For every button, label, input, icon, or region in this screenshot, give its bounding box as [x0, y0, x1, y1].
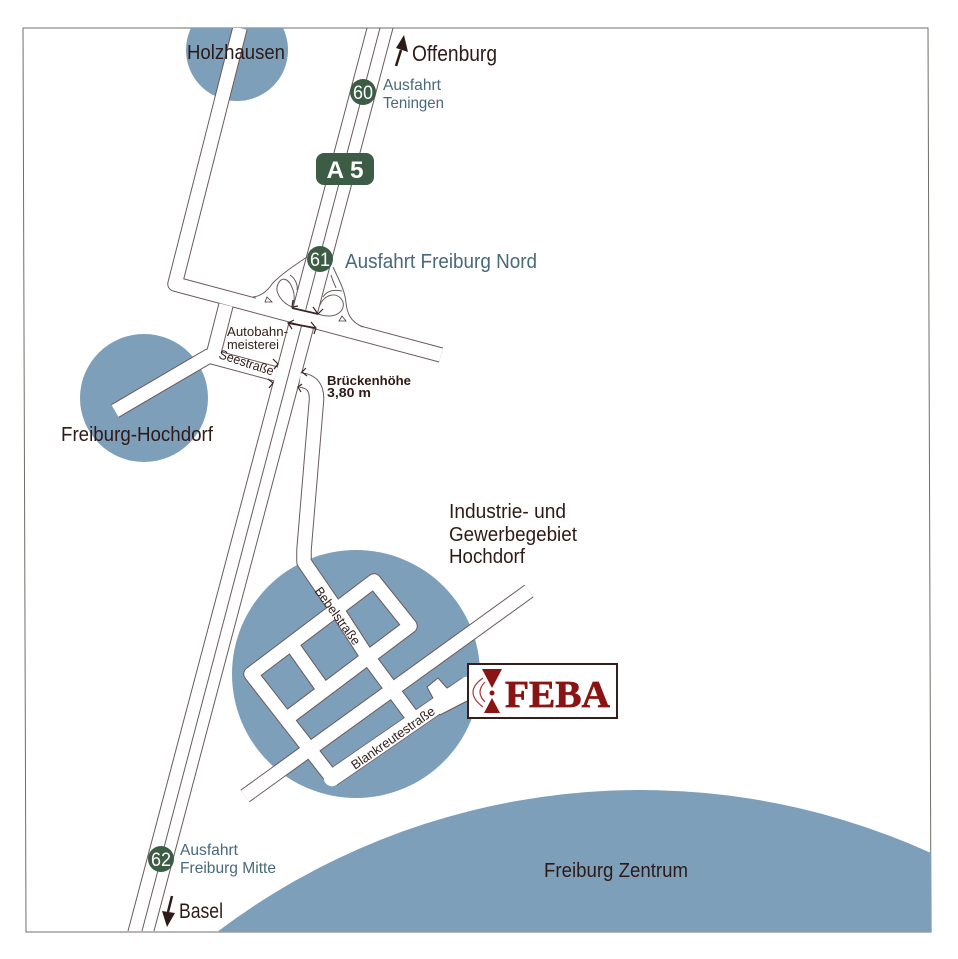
logo mark [473, 669, 502, 713]
label: Brückenhöhe: Brückenhöhe [327, 374, 411, 388]
motorway sign A 5 [316, 153, 374, 185]
label: Basel: Basel [179, 900, 223, 923]
label: Brückenhöhe: 3,80 m [327, 386, 371, 400]
label: Autobahnmeisterei: Autobahn- [227, 324, 288, 339]
exit 62: 62 [151, 850, 171, 871]
label: Ausfahrt Teningen: Teningen [383, 95, 444, 112]
district: Industrie- und Gewerbegebiet Hochdorf [232, 550, 480, 798]
motorway junction Freiburg Nord [253, 257, 363, 327]
label: Industrie- und Gewerbegebiet Hochdorf: Gewerbegebiet [449, 524, 577, 546]
label: Freiburg-Hochdorf: Freiburg-Hochdorf [61, 424, 213, 446]
district: Freiburg Zentrum [217, 790, 931, 932]
label: Industrie- und Gewerbegebiet Hochdorf: Industrie- und [449, 501, 566, 523]
label: Holzhausen: Holzhausen [187, 42, 285, 64]
road surfaces [115, 28, 529, 796]
road outlines [115, 28, 529, 796]
label: Ausfahrt Teningen: Ausfahrt [383, 77, 442, 94]
arrow to Basel [162, 896, 175, 927]
exit 62 [148, 846, 174, 872]
label: Freiburg Zentrum: Freiburg Zentrum [544, 860, 688, 882]
exit 60 [350, 79, 376, 105]
exit 61 [307, 246, 333, 272]
label: Autobahnmeisterei [227, 324, 288, 352]
exit 61: 61 [310, 250, 330, 271]
label: Seestraße: Seestraße [217, 347, 276, 378]
motorway A5 [128, 28, 393, 931]
label: Ausfahrt Freiburg Mitte [180, 842, 276, 877]
label: Autobahnmeisterei: meisterei [227, 337, 279, 352]
junction triangles [265, 297, 346, 321]
opening of the slip roads [256, 298, 360, 326]
district: Holzhausen [186, 28, 288, 101]
direction chevrons [268, 300, 323, 392]
FEBA logo [468, 664, 617, 718]
label: Brückenhöhe [327, 374, 411, 400]
label: Ausfahrt Freiburg Nord: Ausfahrt Freiburg Nord [345, 251, 537, 273]
exit 60: 60 [353, 83, 373, 104]
label: Ausfahrt Teningen [383, 77, 444, 112]
motorway sign A 5: A 5 [326, 157, 364, 184]
logo wordmark: FEBA [505, 674, 611, 716]
arrow to Offenburg [396, 35, 408, 66]
district: Freiburg-Hochdorf [80, 334, 208, 462]
label: Bebelstraße: Bebelstraße [312, 584, 364, 648]
label: Industrie- und Gewerbegebiet Hochdorf: Hochdorf [449, 546, 525, 568]
bridge parapets [288, 308, 318, 328]
label: Industrie- und Gewerbegebiet Hochdorf [449, 501, 577, 568]
label: Offenburg: Offenburg [412, 41, 497, 66]
label: Blankreutestraße: Blankreutestraße [348, 703, 438, 772]
label: Ausfahrt Freiburg Mitte: Freiburg Mitte [180, 860, 276, 877]
label: Ausfahrt Freiburg Mitte: Ausfahrt [180, 842, 239, 859]
